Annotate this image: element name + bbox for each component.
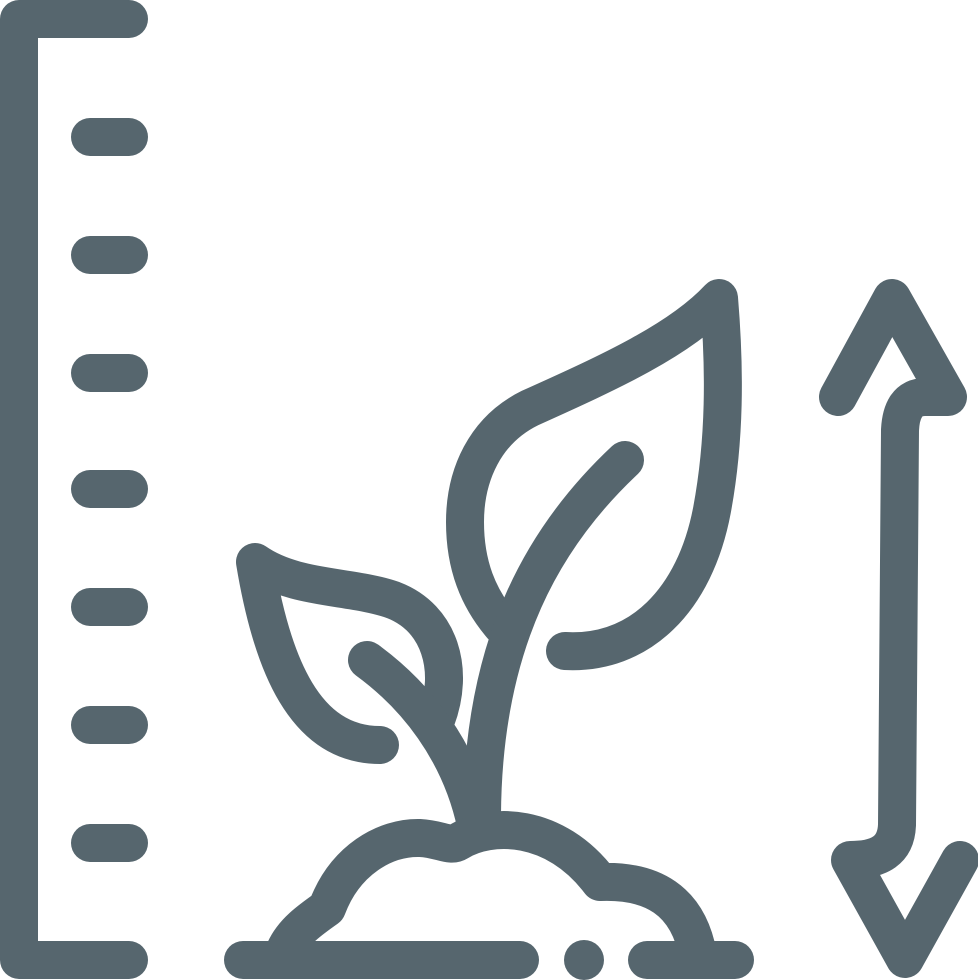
soil dot (564, 940, 604, 980)
large leaf (465, 298, 723, 651)
double-headed arrow (838, 298, 960, 959)
soil base line (243, 941, 520, 979)
small leaf (255, 562, 444, 745)
large leaf stem (482, 460, 625, 815)
ruler frame (19, 19, 129, 960)
ruler ticks (90, 137, 129, 843)
soil mound (285, 830, 698, 955)
small leaf stem (367, 660, 476, 825)
soil base right line (647, 941, 735, 979)
